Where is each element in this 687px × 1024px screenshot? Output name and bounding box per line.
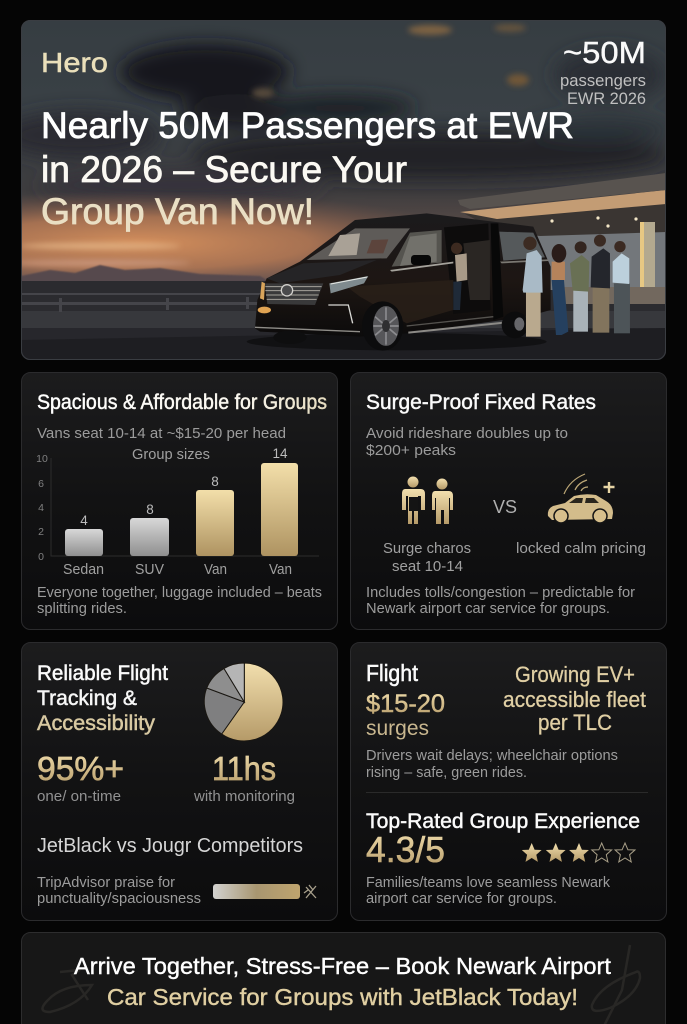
bar chart: group sizes: 10 [36,453,48,465]
roadside barrier [21,293,266,312]
caption: surge chaos: Surge charos [383,540,471,557]
icon: car with plus [548,474,614,523]
heading: Accessibility [37,711,155,735]
EV fleet callout: Growing EV+ [515,662,635,687]
reviews note: airport car service for groups. [366,891,557,907]
flight price block [366,660,445,740]
heading: Spacious & Affordable for Groups [37,391,327,414]
driver note: rising – safe, green rides. [366,765,527,781]
call-to-action text: Arrive Together, Stress-Free – Book Newark Airport [74,953,612,979]
bar chart: group sizes [36,446,319,578]
subheading [366,425,568,459]
bar chart: group sizes: 14 [272,446,288,461]
bar chart: group sizes: 2 [38,526,44,538]
rating heading: Top-Rated Group Experience [366,810,640,833]
hero photo: van at airport dusk [0,20,670,360]
footnote [366,585,635,617]
reviews note [366,875,611,907]
flight price block: surges [366,717,429,740]
flight price block: Flight [366,660,419,686]
footnote: Includes tolls/congestion – predictable for [366,585,635,601]
competitors comparison heading: JetBlack vs Jougr Competitors [37,834,303,857]
stat: ~50M passengers: ~50M [563,35,646,70]
ground and road [21,281,666,311]
panel: reliable flight tracking [22,642,338,920]
stat: 95%+ on-time: 95%+ [37,750,124,787]
panel: surge-proof fixed rates [350,372,666,630]
pie chart [204,663,283,741]
TripAdvisor note: punctuality/spaciousness [37,891,201,907]
praise meter bar [213,884,300,899]
passengers queue [523,235,630,337]
card background [350,642,666,920]
footnote: Everyone together, luggage included – beats [37,585,322,601]
card background [350,372,666,630]
bar chart: group sizes: 4 [38,502,44,514]
heading [37,661,168,735]
terminal building [458,173,666,304]
rating value: 4.3/5 [366,829,445,870]
footnote: Newark airport car service for groups. [366,601,610,617]
icon: two standing passengers [402,476,453,524]
bar chart: group sizes: SUV [135,562,164,578]
EV fleet callout: accessible fleet [503,687,646,712]
distant hills [21,265,270,282]
subheading: Avoid rideshare doubles up to [366,425,568,442]
bar chart: group sizes: Sedan [63,562,104,578]
heading: Surge-Proof Fixed Rates [366,391,596,414]
panel: flight and fleet with rating [350,642,666,920]
TripAdvisor note: TripAdvisor praise for [37,875,175,891]
bar chart: group sizes: Van [204,562,227,578]
panel: spacious and affordable [22,372,338,630]
footnote: splitting rides. [37,601,127,617]
bar chart: group sizes: 6 [38,478,44,490]
card background [22,372,338,630]
bar chart: group sizes: 8 [211,474,219,489]
stat: ~50M passengers: passengers [560,71,646,90]
icon: crossed tools [304,885,316,898]
hero headline: in 2026 – Secure Your [41,149,407,190]
stat: 11hs with monitoring [193,750,295,805]
subheading: $200+ peaks [366,442,456,459]
text: VS: VS [493,497,517,517]
TripAdvisor note [37,875,201,907]
EV fleet callout [503,662,646,735]
caption: locked pricing: locked calm pricing [516,540,646,557]
hero border [22,20,666,360]
star rating [522,843,635,862]
stat: 11hs with monitoring: 11hs [212,750,276,787]
panel: call to action [22,932,666,1024]
stat: ~50M passengers [560,35,646,108]
bar chart: group sizes: 0 [38,551,44,563]
banner background [22,932,666,1024]
bar chart: group sizes: Van [269,562,292,578]
caption: surge chaos: seat 10-14 [392,558,463,575]
driver note [366,748,618,781]
label: Hero: Hero [41,47,108,78]
flight price block: $15-20 [366,690,445,718]
stat: 11hs with monitoring: with monitoring [193,789,295,805]
bar chart: group sizes: 4 [80,513,88,528]
caption: surge chaos [383,540,471,575]
stat: 95%+ on-time: one/ on-time [37,789,121,805]
subheading: Vans seat 10-14 at ~$15-20 per head [37,425,286,442]
bar chart: group sizes: Group sizes [132,447,210,463]
card background [22,642,338,920]
hero headline [41,105,574,232]
EV fleet callout: per TLC [538,710,612,735]
stat: ~50M passengers: EWR 2026 [567,89,646,108]
heading: Reliable Flight [37,661,168,685]
call-to-action text [74,953,612,1010]
bar chart: group sizes: 8 [146,502,154,517]
reviews note: Families/teams love seamless Newark [366,875,611,891]
hero headline: Group Van Now! [41,191,314,232]
driver note: Drivers wait delays; wheelchair options [366,748,618,764]
decorative swooshes [42,945,640,1024]
panel: hero [0,20,670,360]
footnote [37,585,322,617]
stat: 95%+ on-time [37,750,124,805]
hero headline: Nearly 50M Passengers at EWR [41,105,574,146]
heading: Tracking & [37,686,137,710]
call-to-action text: Car Service for Groups with JetBlack Today! [107,984,578,1010]
van [247,213,551,351]
